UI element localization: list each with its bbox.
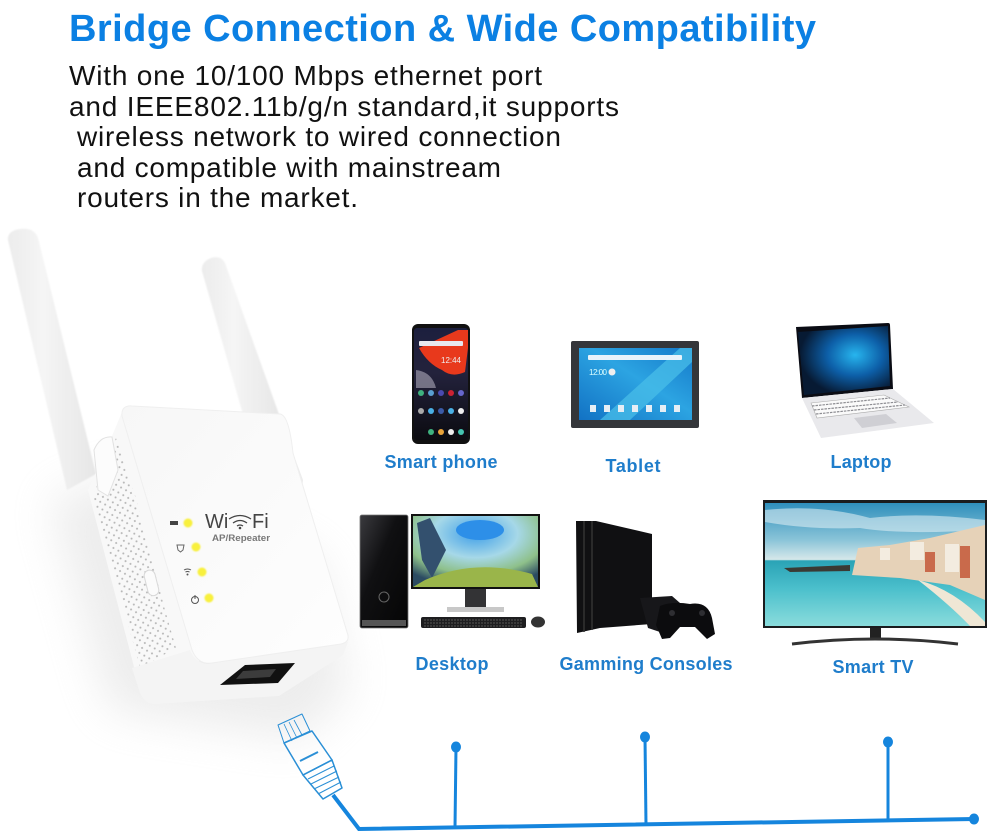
WiFi logo: Fi bbox=[252, 511, 269, 533]
antenna hinge bbox=[94, 437, 118, 496]
WiFi logo bbox=[205, 511, 270, 544]
device labels: Smart TV bbox=[832, 657, 914, 677]
device: tablet: 12:00 bbox=[589, 368, 608, 377]
device labels: Smart phone bbox=[384, 452, 498, 472]
right hinge bbox=[293, 453, 303, 490]
description text bbox=[69, 60, 619, 213]
router bbox=[8, 229, 350, 740]
description text: With one 10/100 Mbps ethernet port bbox=[69, 60, 542, 91]
status LEDs bbox=[170, 518, 214, 604]
description text: and IEEE802.11b/g/n standard,it supports bbox=[69, 91, 619, 122]
network cable with branches bbox=[333, 732, 979, 829]
device labels: Laptop bbox=[830, 452, 892, 472]
WiFi logo: Wi bbox=[205, 511, 228, 533]
device: desktop bbox=[360, 514, 545, 628]
WiFi logo: AP/Repeater bbox=[212, 533, 270, 544]
bottom face bbox=[132, 642, 348, 704]
vent dots bbox=[93, 438, 176, 668]
device: smart phone: 12:44 bbox=[441, 356, 462, 365]
left antenna bbox=[8, 229, 96, 490]
ethernet port bbox=[220, 663, 295, 685]
description text: routers in the market. bbox=[77, 182, 358, 213]
device labels: Gamming Consoles bbox=[560, 654, 732, 674]
device labels bbox=[384, 452, 914, 677]
description text: and compatible with mainstream bbox=[77, 152, 501, 183]
right antenna bbox=[202, 257, 281, 425]
device labels: Tablet bbox=[606, 456, 660, 476]
front face bbox=[122, 406, 348, 663]
device: smart phone bbox=[412, 324, 470, 444]
router shadow bbox=[50, 470, 350, 740]
desktop tower bbox=[360, 515, 408, 628]
device labels: Desktop bbox=[416, 654, 488, 674]
device: smart TV bbox=[763, 500, 987, 644]
desktop monitor bbox=[411, 514, 540, 612]
side button bbox=[143, 569, 160, 597]
device: tablet bbox=[571, 341, 699, 428]
device: gaming console bbox=[576, 521, 715, 639]
ethernet plug bbox=[278, 714, 342, 799]
side vent panel bbox=[88, 412, 200, 690]
device: laptop bbox=[796, 323, 934, 438]
description text: wireless network to wired connection bbox=[76, 121, 561, 152]
title: Bridge Connection & Wide Compatibility bbox=[69, 8, 816, 50]
keyboard and mouse bbox=[421, 616, 545, 628]
